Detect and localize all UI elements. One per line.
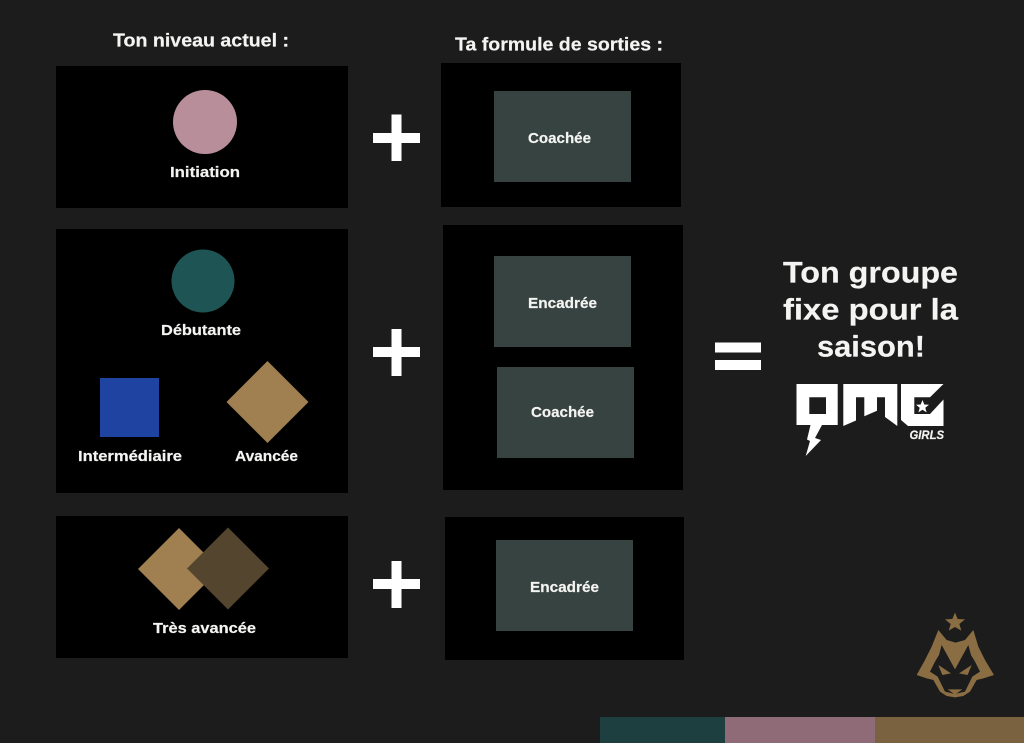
- icon: teal circle: [172, 250, 234, 312]
- box: Coachée: [494, 91, 631, 182]
- logo: QMG Girls: [796, 384, 944, 456]
- icon: equals sign: [715, 342, 761, 370]
- icon: dark brown diamond: [187, 528, 269, 610]
- logo star: [916, 400, 929, 412]
- box: Encadrée: Encadrée: [528, 295, 597, 312]
- box: Encadrée: Encadrée: [530, 579, 599, 596]
- panel: supervised formula: [445, 517, 684, 660]
- icon: tan diamond: [138, 528, 220, 610]
- colour band: pink: [725, 717, 875, 743]
- wolf head: [917, 630, 994, 697]
- icon: plus 1: [373, 114, 420, 161]
- result text: [783, 256, 958, 364]
- result text: Ton groupe: [783, 256, 958, 290]
- panel: initiation level: [56, 66, 348, 208]
- label: Très avancée: Très avancée: [153, 620, 256, 637]
- icon: plus 2: [373, 329, 420, 376]
- box: Coachée: [497, 367, 634, 458]
- colour band: gold: [875, 717, 1024, 743]
- label: Intermédiaire: Intermédiaire: [78, 448, 182, 465]
- result text: saison!: [817, 330, 925, 364]
- wolf eyes: [938, 665, 972, 675]
- logo letter M: [843, 384, 897, 426]
- star: [945, 613, 965, 631]
- icon: blue square: [100, 378, 159, 437]
- label: Avancée: Avancée: [235, 448, 298, 465]
- panel: beginner, intermediate and advanced levels: [56, 229, 348, 493]
- heading: outing formula: Ta formule de sorties :: [455, 34, 663, 54]
- logo letter G: [901, 384, 944, 426]
- result text: fixe pour la: [783, 294, 958, 326]
- icon: tan diamond: [226, 361, 308, 443]
- icon: pink circle: [173, 90, 237, 154]
- icon: wolf emblem with star: [917, 613, 994, 697]
- heading: current level: Ton niveau actuel :: [113, 30, 289, 50]
- box: Coachée: Coachée: [531, 404, 594, 421]
- panel: very advanced level: [56, 516, 348, 658]
- wolf face shadows: [930, 645, 980, 694]
- icon: plus 3: [373, 561, 420, 608]
- label: Initiation: Initiation: [170, 164, 240, 181]
- wolf chin: [948, 689, 962, 695]
- box: Encadrée: [496, 540, 633, 631]
- label: Débutante: Débutante: [161, 322, 241, 339]
- logo word: GIRLS: GIRLS: [910, 430, 944, 442]
- panel: coached formula: [441, 63, 681, 207]
- logo letter Q with lightning bolt: [796, 384, 838, 456]
- colour band: teal: [600, 717, 725, 743]
- box: Encadrée: [494, 256, 631, 347]
- panel: supervised and coached formulas: [443, 225, 683, 490]
- box: Coachée: Coachée: [528, 130, 591, 147]
